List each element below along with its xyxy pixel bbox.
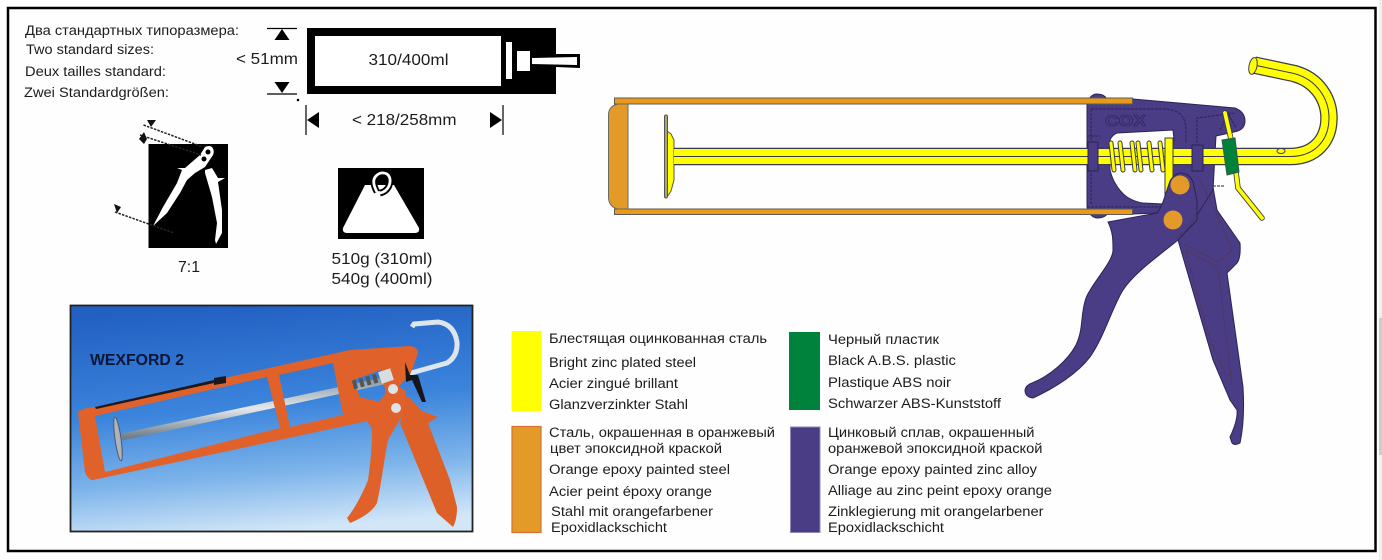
legend: orange epoxy painted zinc alloy: Цинковый сплав, окрашенный bbox=[828, 425, 1034, 441]
purple body bbox=[1087, 94, 1245, 218]
legend: orange epoxy painted zinc alloy: оранжевой эпоксидной краской bbox=[828, 441, 1042, 457]
text block: standard sizes in four languages: Zwei Standardgrößen: bbox=[24, 85, 169, 101]
legend: black ABS plastic: Black A.B.S. plastic bbox=[828, 353, 956, 369]
plunger disc bbox=[664, 115, 674, 198]
orange pivot pins bbox=[1164, 176, 1190, 230]
text block: standard sizes in four languages: Два стандартных типоразмера: bbox=[25, 23, 239, 39]
legend: orange epoxy painted zinc alloy: Epoxidlackschicht bbox=[828, 520, 944, 536]
legend: orange epoxy painted zinc alloy bbox=[790, 425, 1052, 536]
diagram: caulking gun materials bbox=[608, 57, 1329, 445]
yellow release lever bbox=[1225, 113, 1262, 218]
orange frame rails bbox=[614, 98, 1132, 214]
photo background bbox=[70, 306, 472, 532]
legend: orange epoxy painted steel: Epoxidlackschicht bbox=[551, 520, 667, 536]
photographed gun bbox=[78, 322, 457, 527]
legend: black ABS plastic: Черный пластик bbox=[828, 332, 940, 348]
icon: weight bbox=[338, 168, 424, 239]
text block: standard sizes in four languages bbox=[24, 23, 239, 101]
cartridge size diagram bbox=[236, 28, 580, 135]
legend: bright zinc plated steel: Блестящая оцинкованная сталь bbox=[549, 331, 767, 347]
weight labels: 510g (310ml) bbox=[332, 251, 432, 268]
legend bbox=[512, 331, 1052, 536]
legend: orange epoxy painted zinc alloy: Zinklegierung mit orangelarbener bbox=[828, 504, 1044, 520]
legend: bright zinc plated steel: Glanzverzinkter Stahl bbox=[549, 397, 688, 413]
purple trigger handle bbox=[1025, 173, 1197, 398]
legend: bright zinc plated steel: Acier zingué brillant bbox=[549, 376, 678, 392]
legend: orange epoxy painted steel: Сталь, окрашенная в оранжевый bbox=[549, 425, 775, 441]
legend: orange epoxy painted steel: Stahl mit orangefarbener bbox=[551, 504, 713, 520]
photo title: WEXFORD 2 bbox=[90, 352, 184, 369]
ratio label: 7:1 bbox=[178, 259, 200, 276]
legend: orange epoxy painted steel: Orange epoxy painted steel bbox=[549, 462, 730, 478]
height dimension bbox=[236, 28, 299, 101]
icon: leverage ratio pliers bbox=[114, 120, 228, 248]
width dimension: < 218/258mm bbox=[352, 112, 456, 129]
legend: black ABS plastic: Plastique ABS noir bbox=[828, 375, 951, 391]
yellow rod and hook bbox=[674, 57, 1329, 157]
width dimension bbox=[306, 105, 503, 135]
legend: black ABS plastic: Schwarzer ABS-Kunststoff bbox=[828, 396, 1001, 412]
weight labels: 540g (400ml) bbox=[332, 271, 432, 288]
cartridge volume label: 310/400ml bbox=[368, 52, 448, 69]
legend: black ABS plastic bbox=[789, 332, 1001, 412]
embossed body logo: COX bbox=[1105, 113, 1146, 130]
purple rod bearings bbox=[1088, 142, 1203, 171]
text block: standard sizes in four languages: Two standard sizes: bbox=[26, 42, 154, 58]
legend: bright zinc plated steel: Bright zinc plated steel bbox=[549, 355, 696, 371]
handle contour lines bbox=[1176, 180, 1233, 385]
legend: orange epoxy painted steel: Acier peint époxy orange bbox=[549, 484, 712, 500]
weight labels bbox=[332, 251, 432, 288]
legend: orange epoxy painted steel bbox=[512, 425, 775, 536]
orange end cap bbox=[608, 104, 628, 209]
legend: bright zinc plated steel bbox=[512, 331, 767, 413]
cartridge icon bbox=[307, 28, 580, 94]
panel: product photo bbox=[70, 306, 472, 532]
body contour lines bbox=[1087, 109, 1236, 207]
yellow locking plate bbox=[1165, 138, 1173, 196]
legend: orange epoxy painted steel: цвет эпоксидной краской bbox=[550, 441, 722, 457]
legend: orange epoxy painted zinc alloy: Orange epoxy painted zinc alloy bbox=[828, 462, 1038, 478]
legend: orange epoxy painted zinc alloy: Alliage au zinc peint epoxy orange bbox=[828, 483, 1052, 499]
green plastic clip bbox=[1222, 138, 1239, 175]
height dimension: < 51mm bbox=[236, 51, 298, 68]
text block: standard sizes in four languages: Deux tailles standard: bbox=[25, 64, 166, 80]
purple rear handle bbox=[1178, 167, 1244, 444]
spring bbox=[1111, 143, 1163, 170]
